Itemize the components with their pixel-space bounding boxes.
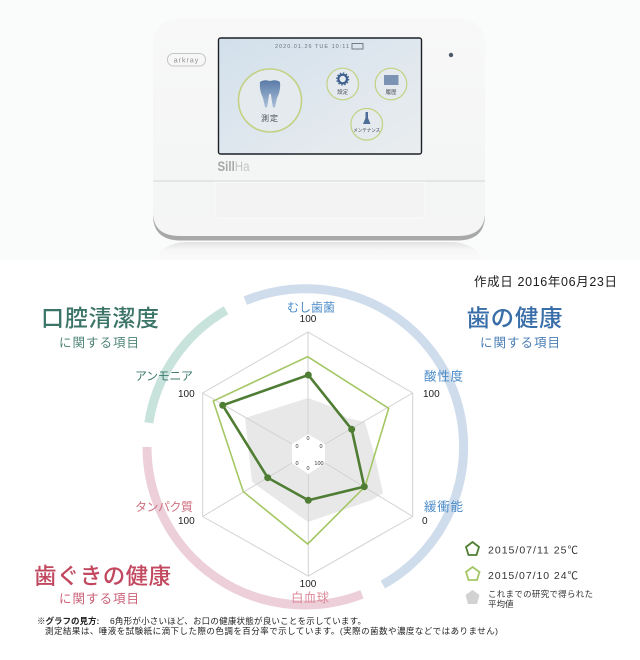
axis label: cavity bacteria	[287, 300, 335, 325]
inner axis values: 0	[319, 444, 323, 450]
axis label: protein	[135, 499, 195, 527]
radar grid	[203, 332, 413, 576]
button: history: 履歴	[385, 89, 397, 96]
radar chart	[203, 332, 413, 576]
product name: SillHa: SillHa	[218, 158, 250, 174]
icon: history panel	[384, 75, 398, 85]
arc: oral cleanliness	[149, 310, 226, 423]
axis label: buffering capacity: 0	[422, 516, 428, 527]
photo background	[0, 0, 640, 260]
heading: tooth health: に関する項目	[480, 336, 560, 350]
footnote: 6角形が小さいほど、お口の健康状態が良いことを示しています。	[110, 616, 366, 626]
axis label: protein: タンパク質	[135, 499, 193, 514]
axis label: white blood cells	[291, 579, 329, 605]
legend item: average: 平均値	[488, 599, 514, 609]
lower panel	[215, 182, 425, 218]
device photo: SillHa	[153, 19, 485, 260]
heading: oral cleanliness: に関する項目	[59, 336, 139, 350]
button: measure: 測定	[261, 113, 279, 123]
footnote	[37, 616, 498, 636]
heading: tooth health: 歯の健康	[466, 305, 562, 331]
button: maintenance: メンテナンス	[353, 128, 380, 134]
axis label: acidity	[423, 368, 463, 400]
footnote: ※グラフの見方:	[37, 616, 100, 626]
average value area	[245, 398, 383, 522]
axis label: ammonia: 100	[178, 389, 195, 400]
axis label: buffering capacity: 緩衝能	[424, 499, 463, 514]
footnote: 測定結果は、唾液を試験紙に滴下した際の色調を百分率で示しています。(実際の菌数や濃度などではありません)	[45, 626, 498, 636]
axis label: cavity bacteria: 100	[300, 314, 317, 325]
heading: gum health: 歯ぐきの健康	[34, 564, 171, 589]
inner axis values: 0	[295, 461, 299, 467]
heading: oral cleanliness	[41, 305, 159, 350]
brand badge: arkray	[168, 54, 206, 66]
device body	[153, 19, 485, 236]
legend item: average: これまでの研究で得られた	[488, 589, 593, 599]
axis label: protein: 100	[178, 516, 195, 527]
device reflection	[155, 242, 483, 260]
creation date: 作成日 2016年06月23日	[474, 275, 617, 289]
button: history	[375, 68, 407, 100]
inner axis values: 0	[295, 444, 299, 450]
brand badge: arkray: arkray	[174, 58, 199, 64]
axis label: white blood cells: 100	[300, 579, 317, 590]
axis label: ammonia: アンモニア	[135, 369, 193, 383]
axis label: acidity: 酸性度	[424, 368, 463, 384]
axis label: cavity bacteria: むし歯菌	[287, 300, 335, 314]
report panel background	[0, 260, 640, 660]
inner axis values: 100	[314, 461, 324, 467]
indicator light	[449, 53, 453, 57]
arc: gum health	[147, 447, 362, 605]
axis label: buffering capacity	[422, 499, 463, 527]
series: 2015/07/10	[213, 357, 389, 544]
icon: tooth	[260, 80, 280, 108]
axis label: acidity: 100	[423, 389, 440, 400]
arc: tooth health	[245, 289, 464, 585]
heading: oral cleanliness: 口腔清潔度	[41, 305, 159, 331]
inner axis values	[295, 436, 324, 472]
button: settings	[327, 68, 359, 100]
lower divider	[153, 180, 485, 182]
heading: tooth health	[466, 305, 562, 350]
axis label: white blood cells: 白血球	[291, 590, 329, 605]
button: measure	[238, 69, 302, 132]
button: maintenance	[351, 108, 383, 140]
inner axis values: 0	[306, 466, 310, 472]
legend item: average	[466, 589, 593, 609]
legend item: 2015/07/11: 2015/07/11 25℃	[488, 544, 578, 556]
heading: gum health	[34, 564, 171, 606]
status bar: 2020.01.26 TUE 10:11	[275, 44, 349, 50]
series: 2015/07/11	[219, 372, 368, 504]
center hexagon	[292, 434, 325, 474]
icon: gear	[337, 73, 349, 85]
legend item: 2015/07/10: 2015/07/10 24℃	[488, 570, 578, 582]
inner axis values: 0	[306, 436, 310, 442]
device shadow	[153, 215, 485, 240]
touch screen	[218, 38, 422, 154]
legend	[466, 542, 593, 609]
heading: gum health: に関する項目	[59, 592, 139, 606]
icon: brush	[363, 112, 370, 124]
axis label: ammonia	[135, 369, 195, 400]
button: settings: 設定	[337, 88, 349, 96]
